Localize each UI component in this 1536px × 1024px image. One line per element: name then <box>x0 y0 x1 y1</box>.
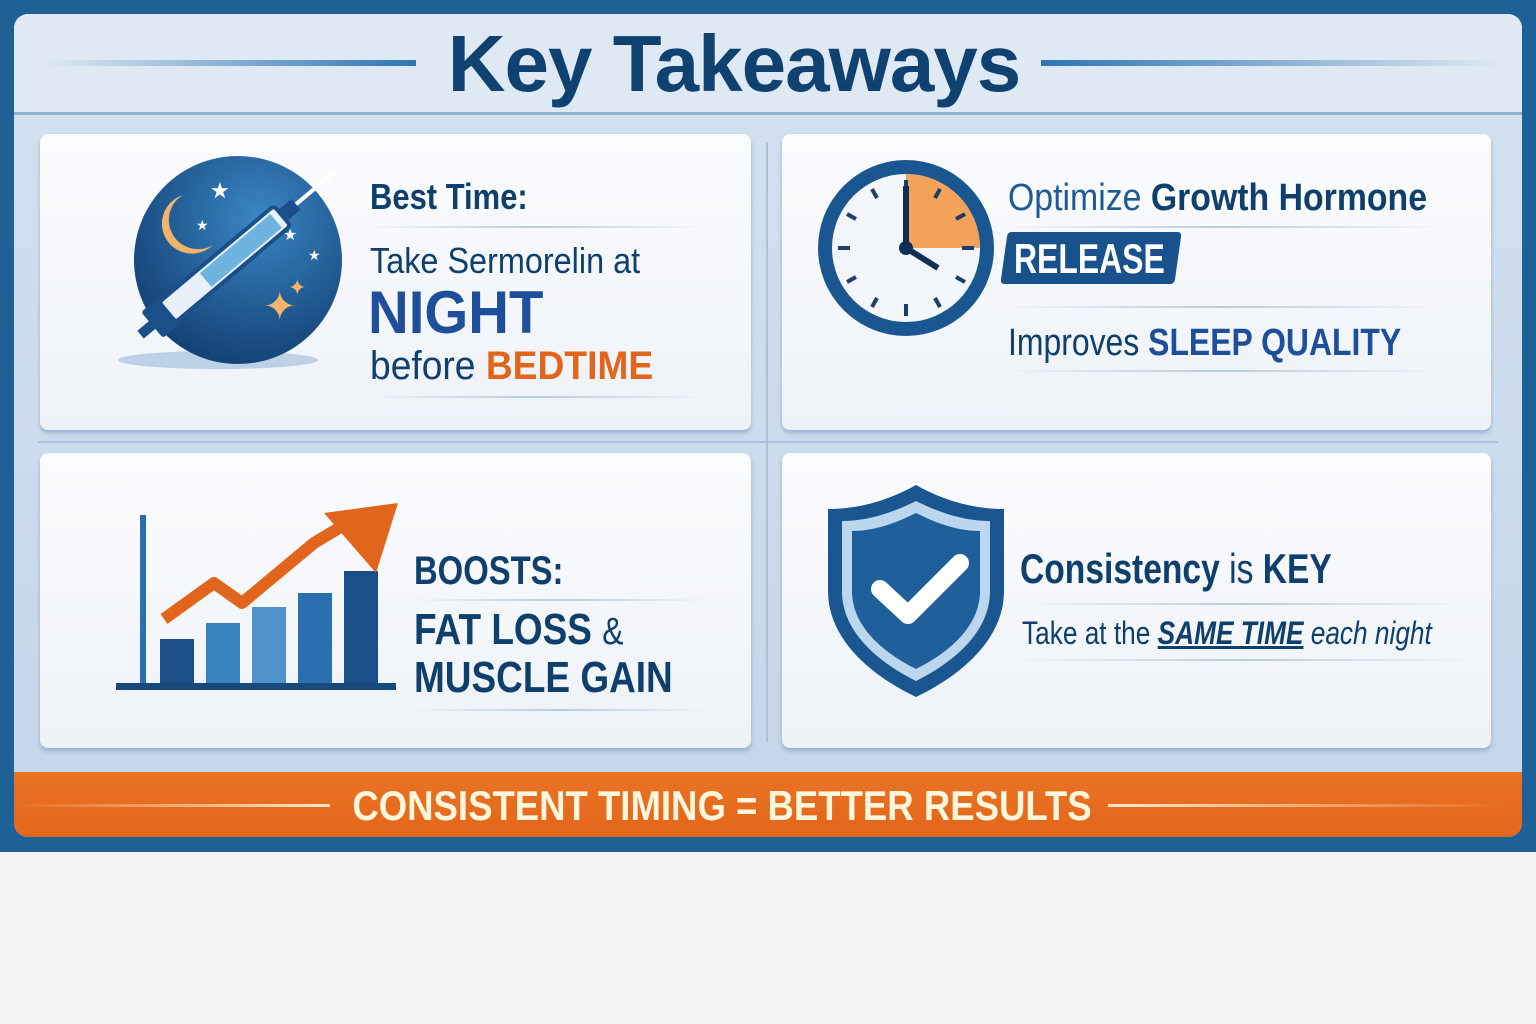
title: Key Takeaways <box>448 19 1020 108</box>
footer banner <box>14 772 1522 837</box>
icon: syringe moon: ✦ <box>263 285 297 329</box>
card: best time: NIGHT <box>368 279 543 346</box>
icon: syringe moon <box>118 156 342 369</box>
title line left <box>44 60 416 66</box>
card: best time: before BEDTIME <box>370 344 653 388</box>
card: best time: Take Sermorelin at <box>370 240 640 281</box>
icon: syringe moon: ★ <box>196 217 209 233</box>
card: growth hormone: Improves SLEEP QUALITY <box>1008 322 1401 364</box>
icon: syringe moon: ★ <box>283 227 297 244</box>
card: best time <box>40 134 751 430</box>
card: consistency <box>782 453 1491 748</box>
card: boosts: FAT LOSS & <box>414 605 624 654</box>
title line right <box>1041 60 1501 66</box>
icon: shield check <box>828 485 1004 697</box>
icon: syringe moon: ★ <box>308 247 321 263</box>
card: growth hormone <box>782 134 1491 430</box>
text: best time: Best Time: <box>370 176 528 217</box>
header <box>14 14 1522 115</box>
card: boosts <box>40 453 751 748</box>
icon: bar chart with arrow <box>116 503 398 690</box>
dividers <box>766 142 768 742</box>
footer banner: CONSISTENT TIMING = BETTER RESULTS <box>352 782 1092 829</box>
icon: syringe moon: ★ <box>210 178 230 203</box>
card: boosts: MUSCLE GAIN <box>414 653 673 702</box>
text: boosts: BOOSTS: <box>414 549 563 593</box>
text: consistency: Consistency is KEY <box>1020 545 1332 592</box>
icon: syringe moon: ✦ <box>288 275 306 300</box>
icon: clock <box>818 160 994 336</box>
card: growth hormone: RELEASE <box>1014 235 1165 282</box>
text: growth hormone: Optimize Growth Hormone <box>1008 177 1427 219</box>
card: consistency: Take at the SAME TIME each night <box>1022 615 1432 651</box>
inner panel <box>14 14 1522 837</box>
badge: release <box>1000 232 1182 284</box>
